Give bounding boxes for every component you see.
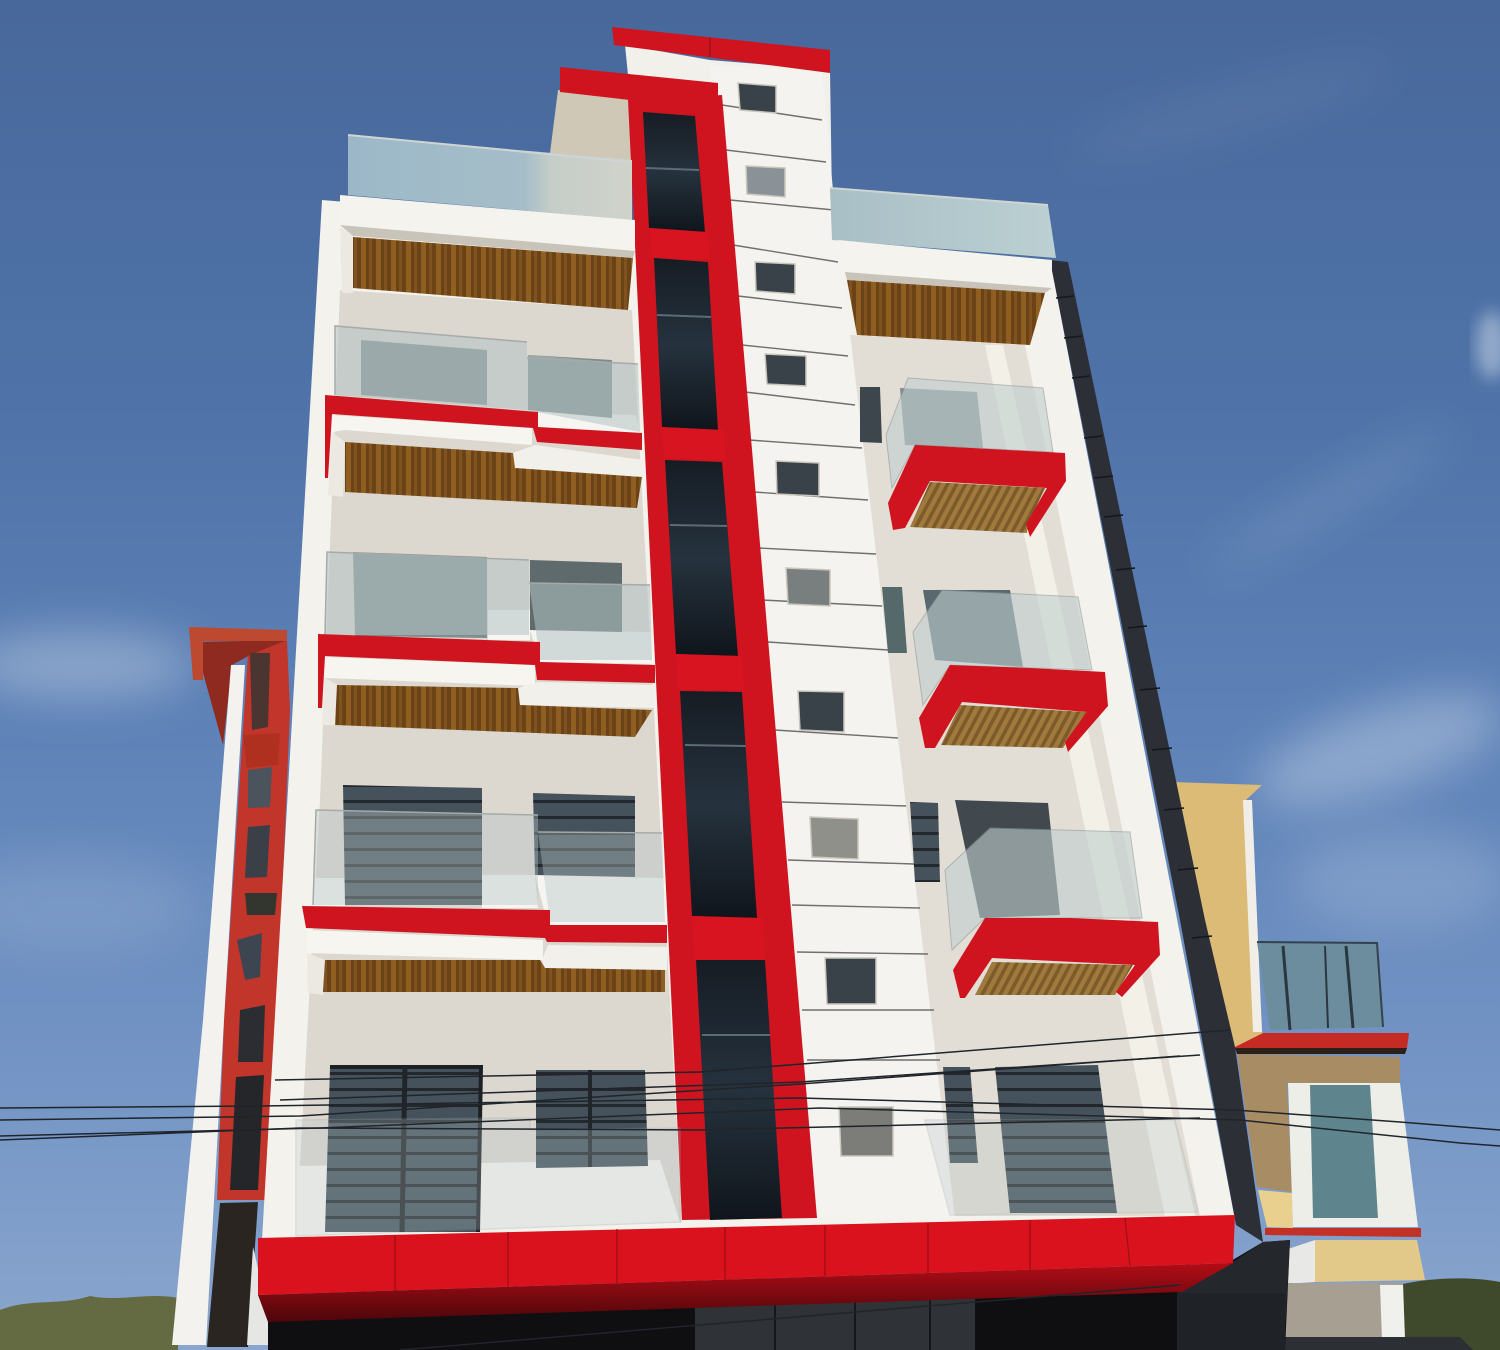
overhead wires (0, 1030, 1500, 1350)
lift shaft dark glazing (643, 112, 782, 1220)
clouds (0, 45, 1500, 955)
lit column right bay (985, 345, 1195, 1216)
left neighbouring tower (172, 627, 290, 1347)
red base fascia (258, 1215, 1235, 1322)
tower panel lines (722, 105, 940, 1060)
right balcony windows (860, 387, 1117, 1213)
recessed wall: left bay (296, 290, 682, 1236)
roof recess beige (550, 90, 632, 162)
red vertical shaft frame (628, 95, 817, 1220)
left top balcony (340, 135, 635, 310)
left balcony floor 2 (325, 326, 643, 508)
central white tower (710, 65, 955, 1218)
main building body (262, 200, 1235, 1240)
right neighbouring building (1172, 782, 1473, 1350)
right top balcony (830, 188, 1056, 345)
ground floor dark storefront (268, 1240, 1290, 1350)
right balcony floor 3 (913, 590, 1108, 752)
trees left (0, 1296, 178, 1350)
ground level glass balustrade left (296, 1118, 680, 1236)
tower small windows (738, 83, 893, 1156)
red band between lift windows (650, 228, 765, 960)
top roof cap: red (612, 27, 830, 73)
ground level glass balustrade right (925, 1120, 1198, 1215)
upper white roof panel (625, 45, 832, 200)
trees right (1403, 1278, 1500, 1350)
left balcony floor 3 (318, 552, 655, 737)
left balcony floor 4 (302, 785, 667, 995)
upper red lintel (560, 67, 718, 100)
right balcony floor 4 (945, 828, 1160, 998)
dark side cladding (1050, 260, 1263, 1242)
ground level windows left (325, 1067, 648, 1232)
right balcony floor 2 (886, 378, 1066, 537)
recessed wall: right bay (850, 335, 1200, 1216)
sunlit wall strips left bay (296, 412, 680, 1236)
